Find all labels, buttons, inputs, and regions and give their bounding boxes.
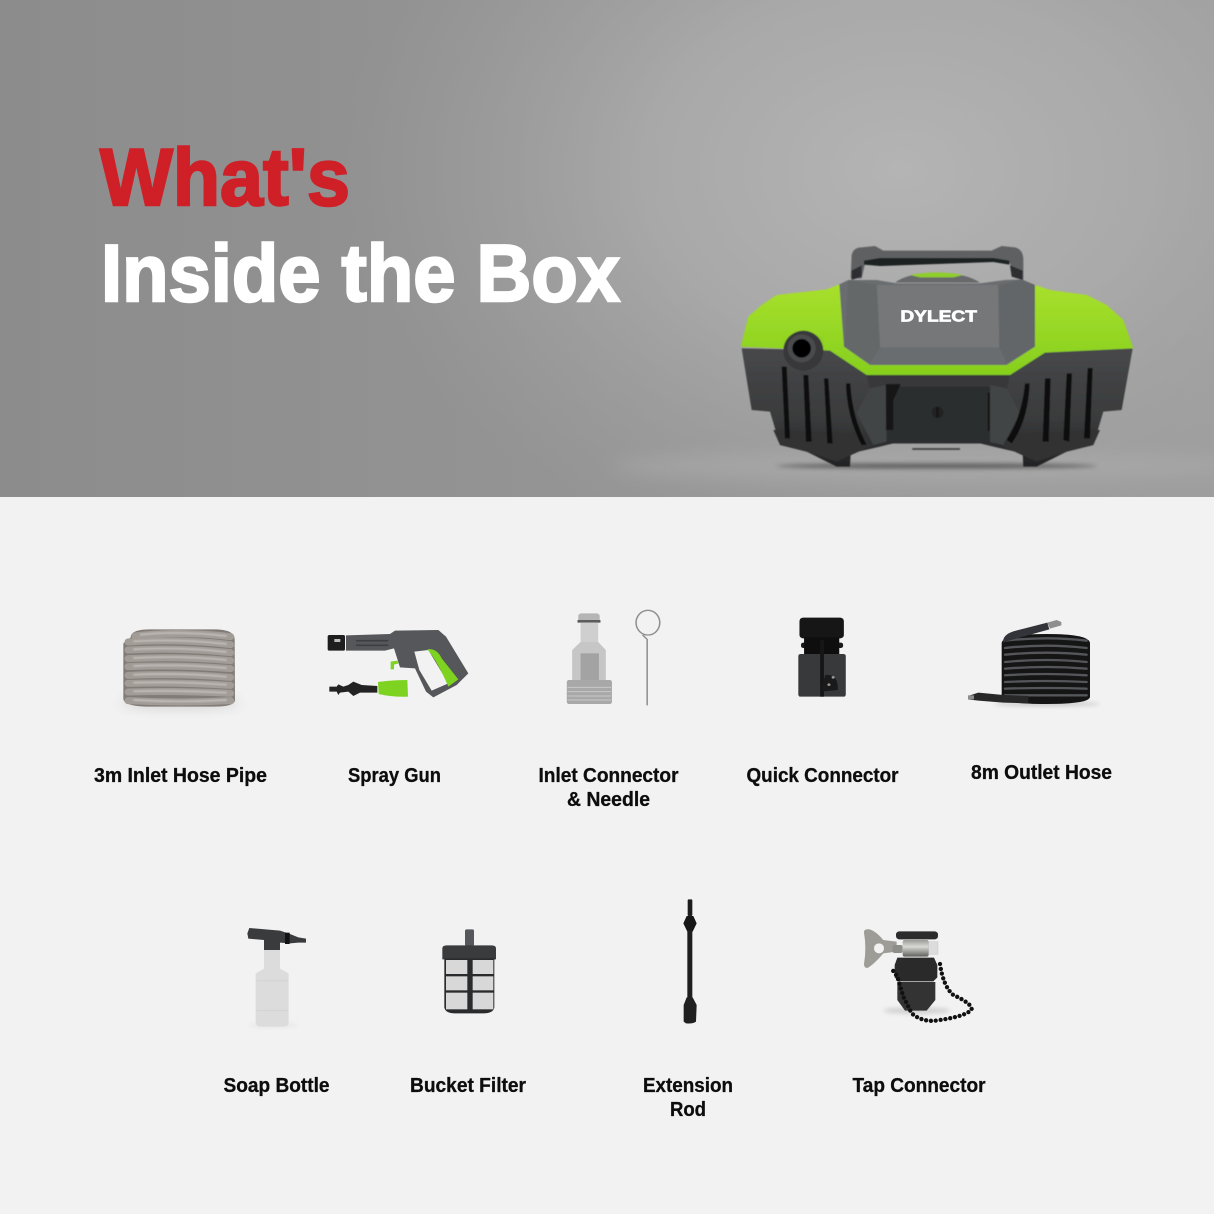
item: extension rod (643, 899, 733, 1121)
icon: tap connector (864, 929, 972, 1021)
panel: light contents background (0, 497, 1214, 1214)
label: Inlet Connector (538, 765, 679, 787)
label: 3m Inlet Hose Pipe (94, 765, 267, 787)
icon: extension rod (683, 899, 697, 1023)
item: 8m outlet hose (968, 620, 1112, 784)
label: 8m Outlet Hose (971, 762, 1112, 784)
icon: hose coil (123, 629, 235, 707)
label: Soap Bottle (224, 1075, 330, 1097)
label: Extension (643, 1075, 733, 1097)
icon: quick connector (798, 618, 846, 697)
item: spray gun (328, 630, 468, 787)
title: What's (100, 133, 350, 223)
icon: soap bottle (247, 928, 306, 1027)
label: Quick Connector (746, 765, 899, 787)
icon: spray gun (328, 630, 468, 697)
product: Dylect pressure washer (741, 246, 1133, 469)
item: tap connector (852, 929, 986, 1097)
item: inlet connector and needle (538, 610, 679, 811)
label: Bucket Filter (410, 1075, 526, 1097)
brand logo text: DYLECT (900, 308, 978, 325)
icon: needle (636, 610, 660, 705)
label: Tap Connector (852, 1075, 986, 1097)
icon: inlet connector (567, 613, 612, 704)
item: extension rod: Rod (670, 1099, 706, 1121)
title: Inside the Box (101, 229, 620, 319)
title (100, 133, 620, 319)
icon: bucket filter (442, 929, 496, 1013)
item: bucket filter (410, 929, 526, 1097)
item: soap bottle (224, 928, 330, 1097)
item: 3m inlet hose pipe (94, 629, 267, 787)
panel: grey header (0, 0, 1214, 497)
item: quick connector (746, 618, 899, 787)
item: inlet connector and needle: & Needle (567, 789, 650, 811)
label: Spray Gun (348, 765, 441, 787)
icon: outlet hose coil (968, 620, 1100, 706)
